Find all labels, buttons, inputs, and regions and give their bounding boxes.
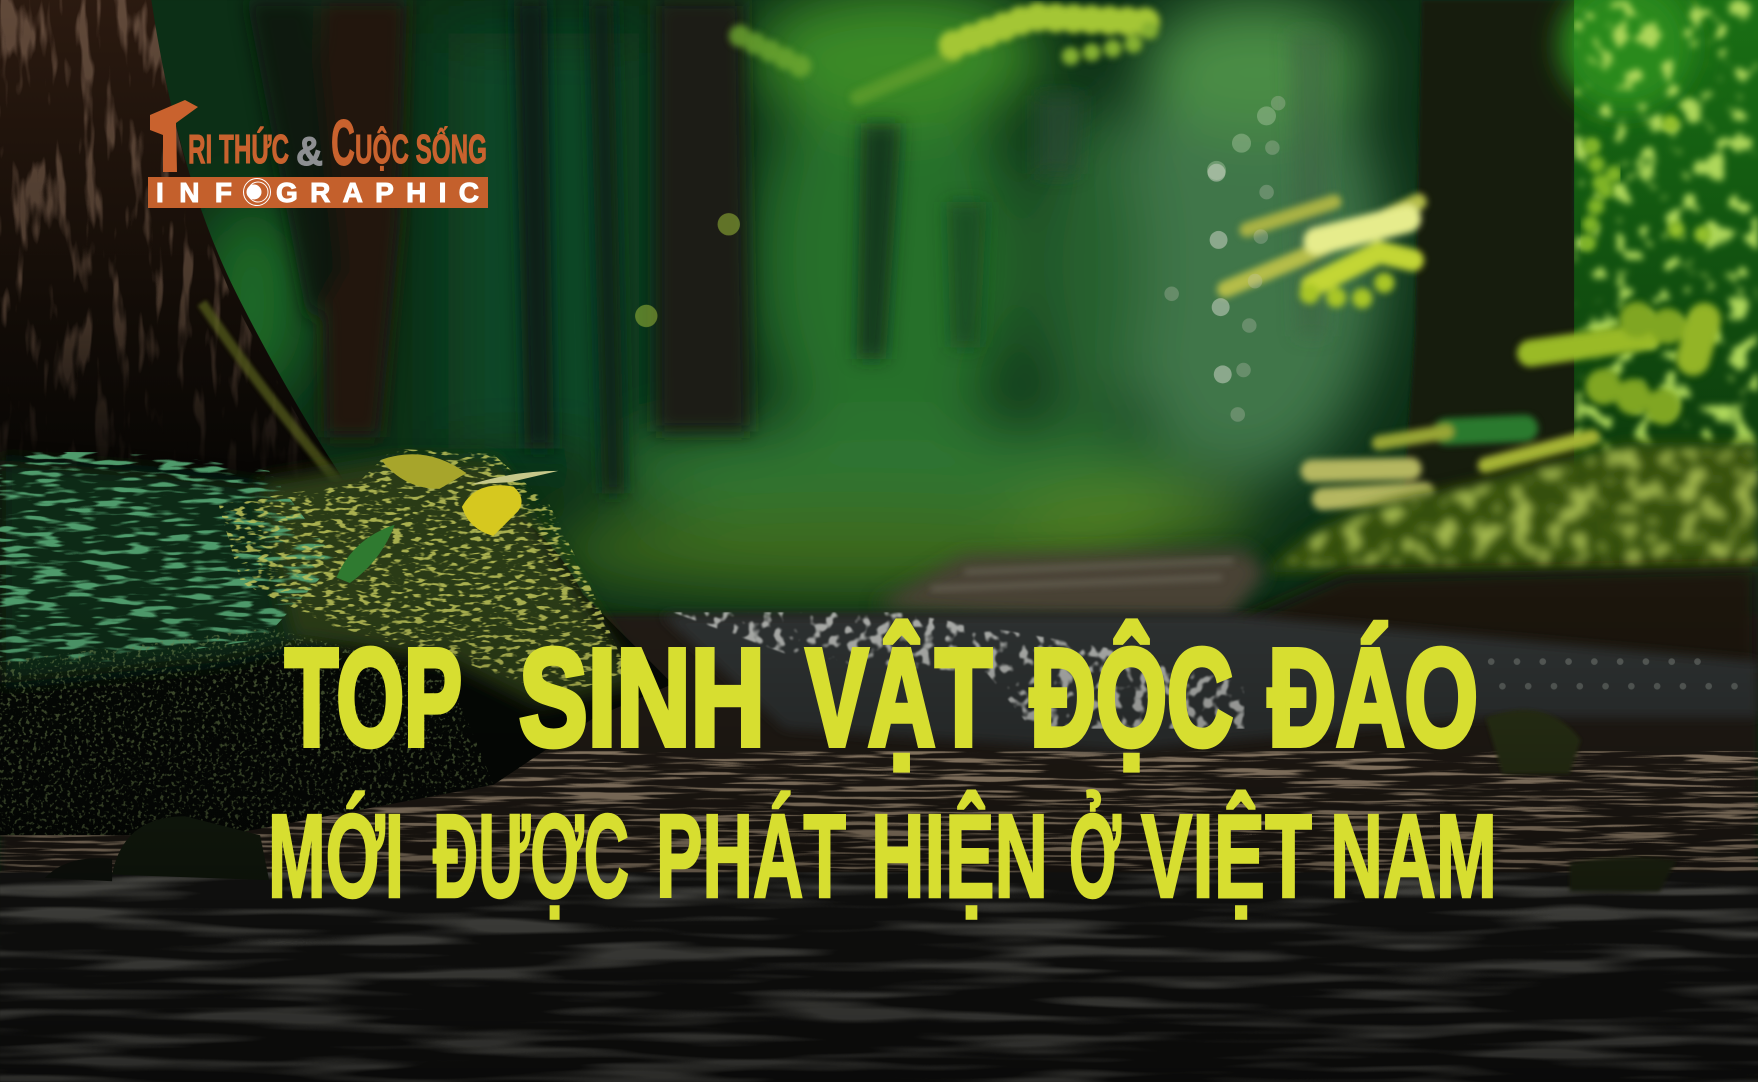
mossy ground on the right	[1267, 443, 1758, 572]
bokeh lights	[628, 103, 1278, 449]
title line 1: SINH	[519, 621, 765, 775]
title line 2: MỚI	[268, 790, 404, 923]
mossy stones on the right side	[1486, 710, 1676, 891]
logo wordmark	[188, 106, 487, 179]
logo wordmark: &	[296, 128, 323, 174]
lime foliage right of the trunk	[1312, 320, 1715, 499]
title line 2: VIỆT	[1141, 790, 1312, 923]
title line 1: TOP	[285, 621, 462, 775]
logo wordmark: RI THỨC	[188, 126, 289, 172]
logo roof T icon	[150, 100, 198, 172]
logo infographic banner: GRAPHIC	[276, 177, 479, 208]
sunlit branch in the centre right	[1225, 202, 1418, 301]
title line 1	[285, 621, 1478, 775]
gravel stream with white specks	[661, 612, 1758, 751]
yellow leaves in the foliage	[336, 454, 558, 583]
fern and moss foliage on left	[0, 449, 673, 835]
logo wordmark: C	[331, 106, 355, 179]
title line 2: NAM	[1330, 790, 1497, 923]
title line 2: ĐƯỢC	[433, 790, 629, 923]
mossy rocks	[45, 816, 269, 881]
leaf wall on the far right	[1558, 0, 1758, 471]
logo infographic banner: INF	[156, 177, 232, 208]
title line 2	[268, 790, 1497, 923]
foreground tree trunk at left	[0, 0, 339, 480]
logo infographic banner	[148, 177, 488, 208]
title line 2: PHÁT	[656, 790, 846, 923]
dark tree trunk on the right	[1401, 0, 1614, 527]
blurred distant tree trunks	[247, 0, 1332, 493]
title line 1: ĐÁO	[1268, 621, 1478, 775]
title line 1: VẬT	[806, 621, 992, 775]
logo wordmark: UỘC SỐNG	[355, 126, 487, 172]
title line 2: Ở	[1069, 790, 1121, 923]
title line 1: ĐỘC	[1030, 621, 1233, 775]
canopy leaves in the top centre	[740, 17, 1166, 98]
logo eye icon	[244, 178, 270, 206]
title line 2: HIỆN	[871, 790, 1048, 923]
forest floor and wooden path	[0, 549, 1758, 1082]
